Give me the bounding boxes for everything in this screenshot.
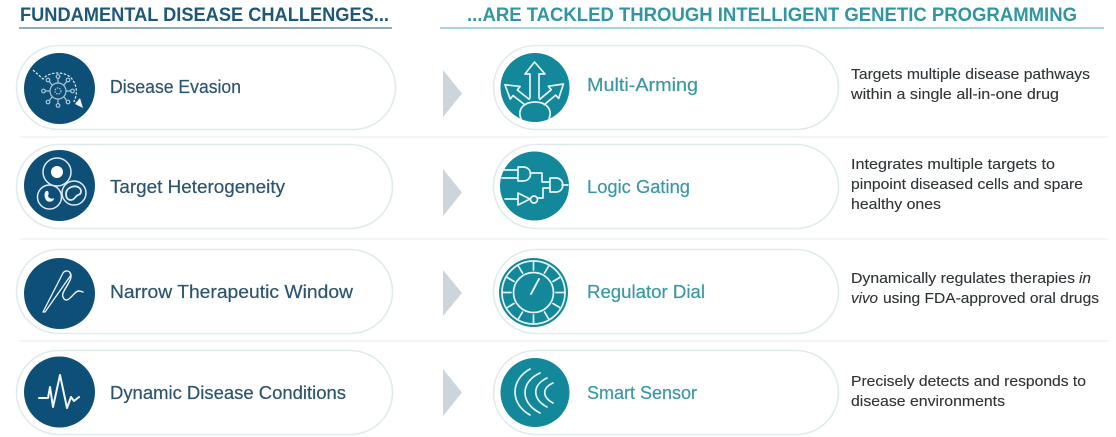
text: multi-arming description: Targets multiple disease pathways [851,67,1090,83]
icon: signal arcs [500,358,570,427]
arrow: row 1 [443,70,462,117]
panel: disease evasion [16,46,396,130]
heading: fundamental disease challenges: FUNDAMENTAL DISEASE CHALLENGES... [20,4,389,26]
label: disease evasion: Disease Evasion [110,77,241,97]
icon: radiating arrows [500,53,570,122]
text: logic gating description: Integrates multiple targets to [851,157,1055,173]
icon: logic gates [500,152,569,220]
icon: heartbeat pulse [24,356,95,428]
panel: multi-arming [494,46,838,130]
label: narrow therapeutic window: Narrow Therapeutic Window [110,282,354,302]
arrow: row 4 [443,369,462,416]
text: regulator dial description: Dynamically regulates therapies [851,271,1075,287]
panel: target heterogeneity [16,144,392,228]
text: logic gating description: healthy ones [851,197,941,213]
text: smart sensor description: Precisely detects and responds to [851,374,1086,390]
text: regulator dial description [851,271,1099,307]
icon: virus with evasion arrow [24,53,95,124]
heading: tackled through intelligent genetic programming: ...ARE TACKLED THROUGH INTELLIGENT GENETIC PROGRAMMING [467,4,1077,26]
text: logic gating description [851,157,1083,213]
panel: logic gating [494,144,838,228]
icon: dial [499,258,568,327]
label: dynamic disease conditions: Dynamic Disease Conditions [110,383,346,403]
text: regulator dial description: using FDA-approved oral drugs [883,291,1099,307]
label: regulator dial: Regulator Dial [587,282,705,302]
label: target heterogeneity: Target Heterogeneity [110,177,285,197]
text: smart sensor description: disease environments [851,394,1005,410]
text: multi-arming description [850,67,1090,103]
icon: three cells [24,150,95,221]
arrow: row 2 [443,169,462,216]
label: logic gating: Logic Gating [587,177,690,197]
text: multi-arming description: within a single all-in-one drug [850,87,1059,103]
text: logic gating description: pinpoint diseased cells and spare [851,177,1083,193]
panel: narrow therapeutic window [16,250,392,334]
text: regulator dial description: in [1079,271,1091,287]
text: smart sensor description [851,374,1086,410]
panel: regulator dial [494,250,838,334]
arrow: row 3 [443,270,462,316]
panel: smart sensor [494,350,838,434]
label: multi-arming: Multi-Arming [587,75,698,95]
text: regulator dial description: vivo [851,291,878,307]
panel: dynamic disease conditions [16,350,392,434]
label: smart sensor: Smart Sensor [587,383,697,403]
icon: needle and thread [24,258,95,329]
